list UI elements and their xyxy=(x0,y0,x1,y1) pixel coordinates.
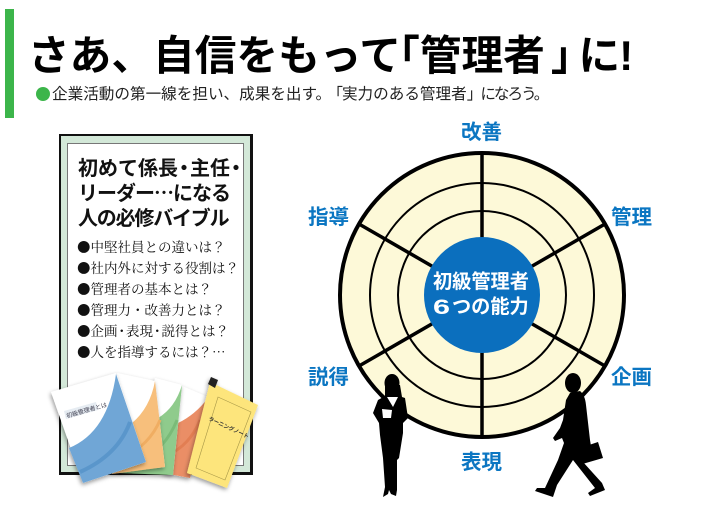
cover question list: ●人を指導するには？… xyxy=(77,341,226,361)
silhouette: man xyxy=(535,373,605,497)
cover question list: ●企画・表現・説得とは？ xyxy=(77,320,229,340)
cover question list: ●社内外に対する役割は？ xyxy=(77,257,239,277)
outer circle xyxy=(340,153,624,437)
cover question list: ●中堅社員との違いは？ xyxy=(77,236,226,256)
inner white page xyxy=(67,143,244,466)
label: 表現: 表現 xyxy=(461,445,502,475)
label: 改善: 改善 xyxy=(461,115,502,145)
yellow notebook: ラーニングノート xyxy=(207,415,250,440)
orange book xyxy=(112,373,165,474)
cover heading xyxy=(78,152,246,231)
green book xyxy=(117,378,182,475)
subtitle xyxy=(36,82,547,104)
centre circle xyxy=(424,237,540,353)
rings xyxy=(370,183,594,407)
subtitle text: 企業活動の第一線を担い、成果を出す。 「実力のある管理者」になろう。 xyxy=(52,82,547,104)
red book xyxy=(163,386,208,478)
blue book: 初級管理者とは xyxy=(65,400,108,420)
centre circle: つの能力 xyxy=(452,291,529,319)
cover heading: 人の必修バイブル xyxy=(78,202,228,231)
panel: book cover xyxy=(59,134,253,475)
cover question list xyxy=(77,236,239,361)
cover question list: ●管理者の基本とは？ xyxy=(77,278,212,298)
blue book xyxy=(51,373,146,483)
cover heading: リーダー…になる xyxy=(78,177,230,206)
title: さあ、自信をもって「管理者」に! xyxy=(28,23,633,83)
spokes xyxy=(359,153,605,437)
centre circle: 6 xyxy=(433,296,450,319)
label: 説得: 説得 xyxy=(308,360,349,390)
label: 企画: 企画 xyxy=(611,360,652,390)
yellow notebook xyxy=(187,377,258,488)
centre circle: 初級管理者 xyxy=(433,266,529,294)
green accent bar xyxy=(5,9,14,118)
label: 指導: 指導 xyxy=(308,200,349,230)
silhouette: woman xyxy=(373,374,408,497)
cover heading: 初めて係長・主任・ xyxy=(78,152,246,181)
green bullet xyxy=(36,87,50,101)
cover question list: ●管理力・改善力とは？ xyxy=(77,299,226,319)
label: 管理: 管理 xyxy=(611,200,652,230)
books illustration xyxy=(48,372,259,492)
